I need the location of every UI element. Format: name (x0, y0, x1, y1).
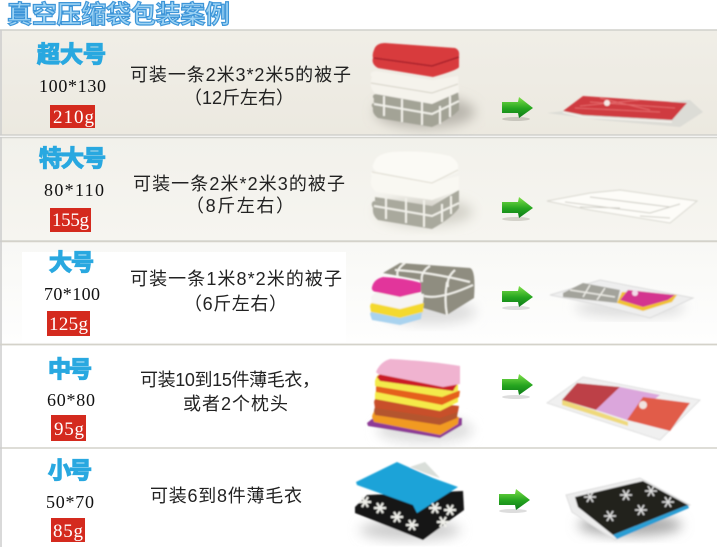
description: 可装一条2米*2米3的被子 (133, 174, 345, 194)
description: （12斤左右） (184, 88, 294, 108)
illustration: compressed bag (547, 96, 703, 127)
illustration: sweater stack (355, 462, 464, 540)
description: （8斤左右） (186, 196, 294, 216)
panel: medium (0, 344, 717, 448)
panel: large (0, 241, 717, 346)
weight badge: 95g (54, 419, 84, 440)
description: 或者2个枕头 (183, 394, 288, 414)
arrow (502, 97, 533, 121)
panel: small (0, 448, 717, 547)
size: 80*110 (44, 180, 104, 200)
size: 60*80 (47, 390, 95, 410)
weight badge: 155g (52, 210, 90, 231)
description (133, 174, 345, 216)
title: 真空压缩袋包装案例 (7, 1, 230, 29)
illustration: sweater stack (367, 359, 473, 443)
description: 可装6到8件薄毛衣 (150, 486, 302, 506)
arrow (502, 374, 533, 399)
description: 可装一条1米8*2米的被子 (130, 269, 342, 289)
description: （6斤左右） (184, 294, 287, 314)
description: 可装10到15件薄毛衣， (140, 370, 320, 390)
description: 可装一条2米3*2米5的被子 (130, 65, 351, 85)
arrow (502, 197, 533, 221)
weight badge: 210g (53, 107, 94, 128)
description (140, 370, 320, 414)
size: 70*100 (44, 284, 100, 304)
description (130, 65, 351, 108)
illustration: blanket stack (371, 43, 475, 128)
description (130, 269, 342, 314)
heading: medium: 中号 (48, 356, 92, 382)
heading: extra large: 超大号 (37, 41, 106, 67)
arrow (499, 489, 530, 513)
weight badge (51, 415, 86, 441)
illustration: compressed bag (550, 280, 693, 318)
size: 100*130 (39, 76, 106, 96)
illustration: compressed bag (547, 190, 697, 223)
illustration: compressed bag (547, 377, 700, 440)
illustration: blanket and clothes (370, 263, 476, 325)
illustration: compressed bag (566, 478, 690, 540)
panel: extra large (0, 30, 717, 135)
heading: small: 小号 (48, 457, 92, 483)
weight badge: 85g (53, 521, 84, 542)
arrow (502, 286, 533, 310)
panel: extra large 2 (0, 137, 717, 241)
size: 50*70 (46, 492, 94, 512)
illustration: blanket stack (371, 152, 473, 229)
weight badge: 125g (49, 314, 88, 335)
heading: extra large 2: 特大号 (39, 145, 106, 171)
heading: large: 大号 (49, 249, 94, 275)
